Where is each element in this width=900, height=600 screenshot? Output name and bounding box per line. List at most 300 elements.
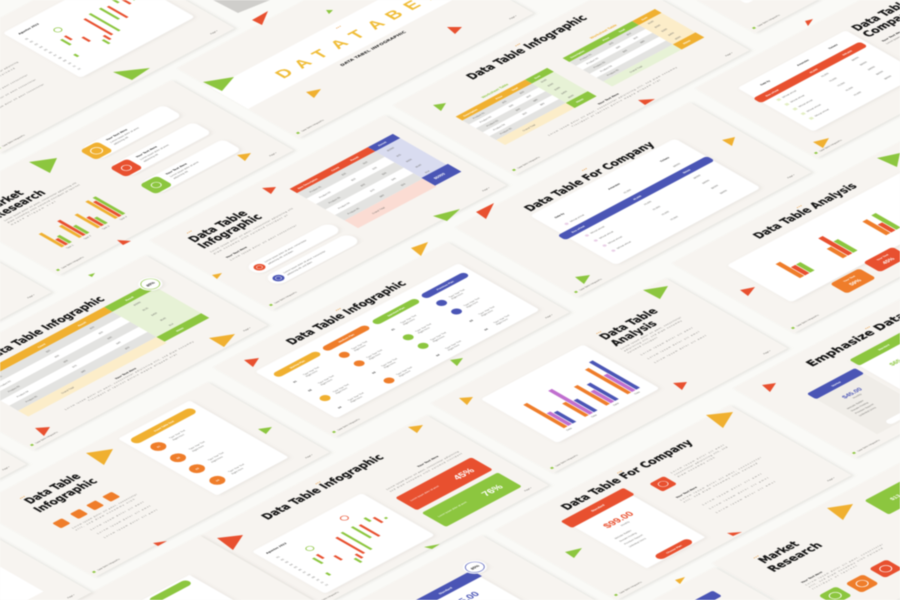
heading: Data Table For Company bbox=[521, 140, 658, 213]
chart markers bbox=[293, 515, 361, 552]
axis labels: 05 bbox=[43, 48, 49, 51]
bar chart: Task 1 bbox=[65, 244, 75, 249]
footer bbox=[511, 52, 735, 172]
axis labels: 03 bbox=[284, 560, 290, 564]
highlighted row: $40,000 bbox=[841, 49, 854, 56]
card header bbox=[676, 591, 722, 600]
data table: $50 bbox=[123, 346, 131, 350]
right table: Product 02 bbox=[585, 57, 600, 65]
left table: Product 04 bbox=[492, 123, 507, 131]
axis labels: 07 bbox=[52, 53, 59, 57]
data table: $640 bbox=[159, 317, 168, 321]
stat card bbox=[864, 456, 900, 515]
pricing card bbox=[560, 488, 707, 570]
list numbers bbox=[147, 440, 229, 487]
page label: Page ▪ bbox=[67, 594, 76, 599]
footer bbox=[295, 15, 519, 135]
icon row bbox=[818, 559, 900, 600]
data table: $5000 bbox=[432, 172, 447, 180]
panel: Big table with green total bbox=[0, 255, 267, 450]
table card: Type Your Text bbox=[462, 297, 481, 307]
data table: $20 bbox=[97, 331, 105, 335]
left table: $80 bbox=[532, 98, 539, 102]
data table: $14 bbox=[167, 322, 175, 327]
left table: $25 bbox=[501, 100, 508, 104]
stat card: red: Lorem ipsum dolor sit amet bbox=[409, 485, 440, 502]
data table: Product 04 bbox=[336, 201, 352, 210]
rows: Wheat wheat bbox=[789, 94, 806, 103]
panel: Data Table Infographic four column list bbox=[213, 242, 569, 437]
heading: Data Table For Company bbox=[558, 438, 696, 512]
decorative dots: ••• bbox=[513, 42, 523, 47]
table card: Type Your Text bbox=[350, 340, 369, 350]
left table: Product 05 bbox=[498, 127, 514, 135]
panel: background slide top left edge: Page ▪ bbox=[27, 294, 36, 299]
left table: $400 bbox=[560, 90, 569, 95]
schedule bars bbox=[294, 511, 415, 578]
right text: Lorem ipsum dolor sit amet, consectetur bbox=[679, 456, 763, 501]
left table: Description bbox=[462, 108, 479, 117]
heading: Data Table bbox=[21, 472, 84, 506]
table card: Right Here bbox=[304, 369, 319, 378]
title letters: D bbox=[271, 66, 298, 81]
icon row bbox=[52, 492, 120, 528]
plan features: Domain Hosting bbox=[618, 531, 638, 542]
right table: $40 bbox=[621, 49, 629, 53]
info card: green: Lorem ipsum dolor sit amet bbox=[168, 161, 200, 178]
pill: blue icon bbox=[264, 233, 361, 286]
rows: Wheat wheat bbox=[813, 108, 830, 117]
heading: Data Table Analysis bbox=[750, 181, 860, 241]
footer bbox=[268, 187, 492, 307]
left table: $50 bbox=[518, 90, 526, 94]
axis labels: 12 bbox=[323, 583, 330, 587]
caption: Tincidunt ut laoreet dolore magna aliquam erat bbox=[570, 79, 662, 128]
data table: $70 bbox=[71, 364, 79, 368]
left table: Price bbox=[494, 95, 504, 100]
list text: Type Your Text bbox=[187, 440, 206, 450]
heading: Infographic bbox=[30, 476, 101, 514]
table card: Right Here bbox=[480, 309, 495, 317]
right text: consectetur adipiscing elit, sed bbox=[673, 446, 729, 476]
rows: 70,000 bbox=[852, 91, 863, 97]
data table: Product 05 bbox=[346, 207, 361, 215]
bars bbox=[516, 360, 640, 428]
axis labels: 12 bbox=[76, 67, 82, 70]
footer bbox=[331, 314, 555, 434]
chart heading: Agustus 2023 bbox=[17, 23, 40, 35]
left table: Product 01 bbox=[471, 111, 486, 119]
list text: Right Here bbox=[171, 433, 186, 441]
heading: Analysis bbox=[607, 319, 660, 348]
stat card: orange: Your Text bbox=[842, 275, 856, 283]
data table: Result bbox=[377, 141, 388, 147]
axis labels: 10 bbox=[315, 578, 321, 581]
list card: 02 bbox=[175, 456, 182, 460]
left table bbox=[450, 64, 597, 145]
caption: Your Text Here bbox=[595, 92, 620, 106]
rows: Wheat wheat bbox=[805, 103, 822, 113]
table card: Right Here bbox=[367, 352, 382, 360]
footer: Page ▪ bbox=[827, 477, 836, 482]
table card: 03 bbox=[371, 371, 377, 374]
icon bbox=[649, 476, 677, 492]
decorative dots: ••• bbox=[594, 330, 604, 335]
panel: Data Table Analysis purple chart bbox=[431, 278, 787, 473]
title letters: B bbox=[381, 7, 408, 22]
heading: Data Table Infographic bbox=[463, 13, 590, 81]
rows: 70,000 bbox=[828, 77, 839, 83]
table card: Type Your Text bbox=[395, 366, 413, 376]
right table: Description bbox=[569, 49, 586, 59]
rows: 70,000 bbox=[642, 200, 653, 206]
panel: Data Table For Company red pricing bbox=[495, 405, 851, 600]
stat card: orange: 59% bbox=[848, 278, 864, 287]
panel: slide fragment top right bbox=[633, 0, 900, 33]
title letters: A bbox=[362, 17, 389, 32]
bar chart: Task 2 bbox=[82, 234, 93, 240]
table card: Type Your Text bbox=[365, 349, 384, 359]
rows: 70,000 bbox=[844, 86, 855, 92]
footer: Page ▪ bbox=[305, 454, 314, 459]
axis labels: 08 bbox=[306, 573, 312, 576]
data table: $640 bbox=[414, 163, 423, 168]
table card: Type Your Text bbox=[414, 322, 433, 333]
heading: Research bbox=[764, 540, 826, 574]
title letters: A bbox=[289, 56, 316, 71]
list card bbox=[141, 575, 271, 600]
right table: $30 bbox=[614, 45, 622, 49]
axis labels: 10 bbox=[66, 61, 73, 65]
body text: Lorem ipsum dolor sit amet, consectetur adipiscing elit bbox=[2, 182, 78, 222]
footer: Page ▪ bbox=[725, 52, 734, 57]
list text: Right Here bbox=[230, 467, 245, 475]
bar chart: Task 3 bbox=[101, 224, 111, 230]
table header bbox=[553, 156, 671, 219]
axis labels: Data bbox=[612, 402, 620, 406]
footer: Page ▪ bbox=[763, 350, 772, 355]
panel: background slide lower left edge bbox=[0, 394, 26, 589]
row markers bbox=[776, 98, 814, 120]
footer: Page ▪ bbox=[269, 152, 278, 157]
rows: 70,000 bbox=[669, 215, 680, 221]
table card: Type Your Text bbox=[492, 314, 511, 324]
column pills: Standard Plan bbox=[386, 306, 406, 317]
info card: yellow: Your Text Here bbox=[104, 128, 129, 142]
right table: $300 bbox=[660, 27, 669, 32]
pill: blue icon: adipiscing elit, sed diam bbox=[285, 261, 313, 276]
right table: $200 bbox=[653, 24, 662, 29]
table header: Data by bbox=[759, 79, 772, 86]
list text: Right Here bbox=[191, 444, 206, 452]
caption: Your Text Here bbox=[415, 455, 440, 468]
right text: elit, sed diam nonummy nibh euismod bbox=[682, 462, 759, 503]
rows: $8000 bbox=[875, 70, 885, 76]
left table: $30 bbox=[507, 103, 515, 108]
plan features: Unlimited Users bbox=[627, 537, 648, 548]
left table: $90 bbox=[538, 102, 546, 106]
axis labels bbox=[565, 390, 642, 431]
decorative dots: ••• bbox=[863, 325, 872, 330]
table card: Right Here bbox=[349, 395, 364, 403]
left table: Worksheet Table bbox=[480, 83, 510, 99]
stat card: green bbox=[422, 472, 522, 527]
highlighted row bbox=[753, 42, 868, 103]
caption: Lorem ipsum dolor sit amet, consectetur adipiscing elit, sed diam nonummy bbox=[547, 66, 679, 136]
progress badge 80%: 80% bbox=[145, 281, 157, 287]
pricing card: startup: Website Builder bbox=[845, 399, 865, 410]
rows: $8000 bbox=[701, 179, 711, 184]
heading: Infographic bbox=[194, 212, 265, 250]
progress badge 85%: 85% bbox=[469, 564, 481, 570]
panel: Data Table Infographic with orange list card bbox=[0, 382, 329, 577]
axis labels: 11 bbox=[71, 64, 77, 68]
rows: Wheat wheat bbox=[606, 235, 624, 245]
right text: Lorem ipsum dolor sit amet bbox=[669, 444, 725, 474]
table card: Right Here bbox=[334, 387, 349, 395]
stat card: green: 76% bbox=[479, 483, 507, 498]
panel: Emphasize Data Table bbox=[733, 263, 900, 458]
card header: Standard bbox=[590, 504, 606, 512]
footer bbox=[549, 350, 773, 470]
table card: Right Here bbox=[495, 317, 510, 326]
table header bbox=[759, 43, 839, 86]
table card: Type Your Text bbox=[331, 383, 350, 393]
pricing card: startup: Premium Support bbox=[853, 403, 875, 414]
info card: red: adipiscing elit bbox=[142, 153, 159, 162]
footer: Page ▪ bbox=[210, 30, 219, 35]
data table: $60 bbox=[359, 183, 367, 187]
stat card: red bbox=[395, 457, 493, 510]
data table: Item Description bbox=[296, 177, 319, 190]
data table: Count bbox=[36, 343, 47, 348]
card header bbox=[560, 488, 635, 528]
footer: Data Table Infographic bbox=[857, 439, 882, 452]
bars bbox=[773, 187, 900, 280]
footer: Data Table Infographic bbox=[819, 139, 844, 152]
right table: Product 03 bbox=[592, 61, 607, 69]
data table: $50 bbox=[399, 182, 407, 187]
chart card bbox=[481, 344, 660, 443]
white title band bbox=[212, 0, 482, 109]
table card: Type Your Text bbox=[429, 331, 448, 341]
footer: Page ▪ bbox=[524, 487, 533, 492]
data table: Count bbox=[330, 166, 341, 172]
rows: $8000 bbox=[866, 65, 877, 71]
footer bbox=[613, 477, 837, 597]
column pills: Premium Plan bbox=[435, 280, 455, 291]
body text: Lorem ipsum dolor sit amet bbox=[653, 334, 707, 364]
footer: Data Table Infographic bbox=[61, 256, 86, 269]
footer: Data Table Infographic bbox=[301, 119, 326, 132]
data table: $5000 bbox=[175, 327, 185, 332]
data table: $5000 bbox=[386, 146, 396, 152]
body text: magna aliquam erat bbox=[9, 200, 57, 226]
data table: $125 bbox=[141, 306, 150, 311]
data table: Grand Total bbox=[60, 386, 76, 394]
panel: background slide right edge bbox=[882, 278, 900, 473]
list card bbox=[118, 401, 289, 496]
data table: Product 03 bbox=[6, 385, 21, 393]
right text: Lorem ipsum dolor sit amet bbox=[701, 473, 763, 506]
table card: Type Your Text bbox=[346, 391, 365, 402]
left table: $50 bbox=[521, 111, 529, 116]
caption: sed diam nonummy nibh euismod tincidunt bbox=[388, 452, 463, 492]
table card: Type Your Text bbox=[447, 288, 466, 298]
table header: Tickets bbox=[827, 43, 839, 50]
axis labels bbox=[275, 555, 330, 587]
body text: Lorem ipsum dolor sit amet bbox=[646, 330, 701, 360]
table card: 03 bbox=[468, 319, 475, 323]
table header: Tickets bbox=[659, 156, 671, 163]
axis labels: Data bbox=[590, 413, 598, 418]
right table: $60 bbox=[632, 36, 640, 40]
highlighted row: Box wheat bbox=[570, 225, 586, 233]
pricing card bbox=[410, 570, 554, 600]
panel: Data Table For Company red table bbox=[695, 0, 900, 158]
card header bbox=[410, 570, 482, 600]
data table: $20 bbox=[371, 166, 379, 170]
pricing card: startup bbox=[807, 368, 900, 434]
heading: Data Table bbox=[596, 306, 661, 342]
body text: Lorem ipsum dolor sit amet, consectetur bbox=[619, 316, 683, 350]
body text: tincidunt ut laoreet bbox=[811, 564, 858, 590]
footer: Data Table Infographic bbox=[555, 454, 580, 467]
stat card: green: Lorem ipsum dolor sit amet bbox=[436, 501, 468, 518]
price: $99.00 bbox=[601, 510, 637, 530]
table card: 01 bbox=[390, 327, 397, 331]
table header: Amandas bbox=[796, 58, 810, 67]
panel: Market Research slide top left bbox=[0, 80, 293, 275]
plan features: Website Builder bbox=[613, 529, 633, 540]
info card: yellow: Lorem ipsum dolor sit amet bbox=[109, 126, 140, 143]
stat card: red: 45% bbox=[881, 257, 897, 265]
right text bbox=[648, 440, 791, 518]
rows: 70,000 bbox=[836, 81, 847, 87]
axis labels: 11 bbox=[319, 581, 325, 584]
axis labels: 04 bbox=[38, 45, 44, 49]
pricing card: standard: Standard bbox=[877, 343, 891, 351]
right table: Sum bbox=[640, 16, 649, 21]
table card: Type Your Text bbox=[444, 340, 462, 350]
stat card: red bbox=[863, 247, 900, 272]
table header: Amandas bbox=[607, 182, 622, 190]
card header: Standard bbox=[437, 586, 454, 595]
row markers bbox=[564, 222, 616, 252]
right table: Worksheet Table bbox=[589, 24, 618, 40]
rows bbox=[568, 162, 729, 250]
title letters: A bbox=[326, 36, 353, 52]
body text: Your Text Here bbox=[799, 571, 824, 584]
decorative dots: ••• bbox=[334, 24, 343, 30]
right table: $80 bbox=[639, 39, 646, 44]
chart card bbox=[727, 168, 900, 302]
axis labels: 07 bbox=[301, 570, 308, 574]
axis labels bbox=[24, 37, 82, 70]
row items bbox=[317, 394, 333, 402]
footer: Data Table Infographic bbox=[579, 278, 604, 291]
body text: adipiscing elit, sed diam nonummy bbox=[622, 319, 684, 352]
data table: $30 bbox=[106, 336, 114, 340]
plan features: Monthly bbox=[619, 520, 631, 527]
pricing card: startup: Unlimited Users bbox=[858, 406, 878, 417]
body text: diam nonummy nibh euismod tincidunt ut laoreet bbox=[6, 183, 81, 224]
subtitle: DATA TABEL INFOGRAPHIC bbox=[339, 30, 407, 67]
pricing card: standard bbox=[849, 329, 900, 407]
footer: Page ▪ bbox=[545, 314, 554, 319]
data table: $50 bbox=[350, 177, 357, 182]
heading: Data Table Infographic bbox=[283, 279, 410, 347]
body text: Lorem ipsum dolor sit amet, consectetur bbox=[70, 493, 138, 529]
table card: Right Here bbox=[397, 369, 412, 377]
list text: Right Here bbox=[210, 455, 225, 463]
body text: elit, sed diam nonummy nibh bbox=[74, 498, 136, 531]
data table: Product 05 bbox=[24, 395, 39, 403]
highlighted row: $9000 bbox=[681, 168, 692, 174]
chart heading: Agustus 2023 bbox=[265, 542, 288, 554]
info card: red: Your Text Here bbox=[134, 145, 158, 159]
caption: Lorem ipsum dolor sit amet, consectetur adipiscing bbox=[385, 450, 460, 490]
rows: Wheat wheat bbox=[598, 230, 615, 239]
footer: Data Table Infographic bbox=[517, 156, 542, 169]
data table: $80 bbox=[80, 369, 87, 373]
pill: blue icon: Lorem ipsum dolor sit amet, consectetur bbox=[282, 250, 327, 274]
axis labels: 01 bbox=[275, 555, 281, 559]
caption: Lorem ipsum dolor sit amet, consectetur adipiscing elit, sed diam nonummy bbox=[63, 340, 195, 411]
heading: Market bbox=[755, 539, 803, 565]
data table: $5000 bbox=[132, 301, 143, 306]
data table: $10 bbox=[88, 325, 96, 330]
table card: Right Here bbox=[446, 343, 461, 351]
rows: $8000 bbox=[850, 56, 861, 61]
panel: background slide lower left edge: Page ▪ bbox=[2, 466, 11, 471]
footer: Page ▪ bbox=[243, 327, 252, 332]
list card: 04 bbox=[214, 479, 221, 482]
info card: yellow: adipiscing elit bbox=[112, 136, 130, 145]
body text bbox=[209, 207, 311, 263]
table header: Data by bbox=[553, 212, 566, 219]
data table: $25 bbox=[395, 153, 403, 157]
left table: $200 bbox=[546, 82, 555, 87]
data table: Product 04 bbox=[15, 390, 30, 398]
body text bbox=[0, 61, 52, 118]
panel: Data Table For Company blue table bbox=[455, 102, 811, 297]
pricing card: startup: $45.00 bbox=[841, 387, 865, 400]
info card: yellow bbox=[78, 105, 182, 161]
caption bbox=[879, 25, 900, 45]
right table: $500 bbox=[673, 35, 683, 40]
panel: grey slide fragment bbox=[213, 0, 270, 13]
axis labels: 03 bbox=[33, 42, 40, 46]
body text bbox=[70, 493, 162, 543]
left table: $5000 bbox=[575, 98, 585, 103]
left table: $40 bbox=[514, 107, 522, 112]
pricing card: startup: Domain Hosting bbox=[849, 401, 870, 412]
column pills: Medium Plan bbox=[337, 333, 356, 343]
data table: Result bbox=[76, 321, 87, 327]
stat card: red: Your Text bbox=[875, 253, 890, 261]
list text: Type Your Text bbox=[168, 429, 187, 439]
panel: Standard pricing slide with 85% badge bbox=[247, 535, 603, 600]
decorative dots: ••• bbox=[185, 229, 194, 234]
decorative dots: ••• bbox=[615, 469, 624, 475]
body text: Lorem ipsum dolor sit amet bbox=[102, 508, 159, 539]
footer: Page ▪ bbox=[482, 187, 491, 192]
footer: Data Table Infographic bbox=[97, 558, 122, 571]
info card: green bbox=[138, 139, 242, 195]
data table: Result bbox=[349, 156, 360, 162]
data table: $60 bbox=[62, 359, 70, 363]
